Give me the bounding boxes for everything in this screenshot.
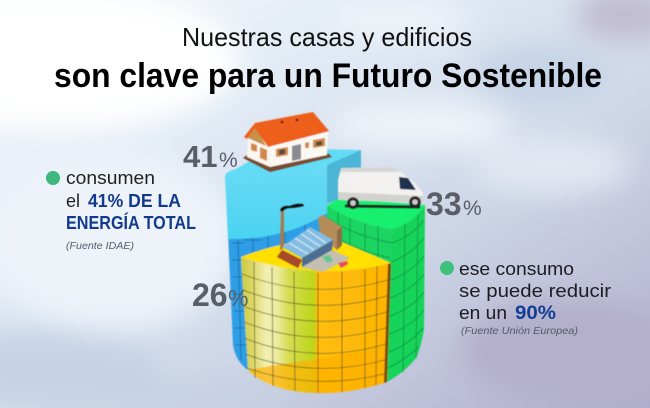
text block: consumption: ENERGÍA TOTAL (66, 212, 196, 233)
label: 41%: % (219, 149, 238, 172)
icon: green bullet (440, 261, 454, 275)
title: son clave para un Futuro Sostenible (54, 57, 602, 95)
text block: consumption: consumen (66, 168, 155, 188)
icon: factory (277, 204, 350, 272)
text block: reduction: en un (459, 303, 507, 323)
text block: reduction: se puede reducir (459, 281, 611, 301)
segment: yellow 26% (241, 240, 391, 393)
text block: consumption: el (66, 191, 80, 211)
label: 33%: 33 (426, 186, 462, 222)
title: Nuestras casas y edificios (182, 22, 472, 52)
segment: green 33% (327, 198, 425, 382)
cylinder chart (225, 148, 425, 393)
text block: reduction: ese consumo (459, 259, 574, 279)
text block: consumption: 41% DE LA (88, 191, 181, 211)
icon: delivery van (338, 167, 423, 209)
text block: reduction (440, 259, 611, 337)
label: 26%: % (228, 285, 248, 311)
label: 41%: 41 (183, 139, 217, 174)
icon: house (243, 112, 332, 172)
segment: blue 41% (225, 148, 361, 370)
text block: reduction: (Fuente Unión Europea) (461, 325, 578, 337)
icon: green bullet (46, 171, 60, 185)
text block: consumption (46, 168, 196, 252)
text block: reduction: 90% (515, 303, 556, 324)
title (54, 22, 602, 95)
label: 33%: % (463, 197, 482, 220)
label: 26%: 26 (192, 277, 228, 313)
text block: consumption: (Fuente IDAE) (66, 240, 134, 252)
